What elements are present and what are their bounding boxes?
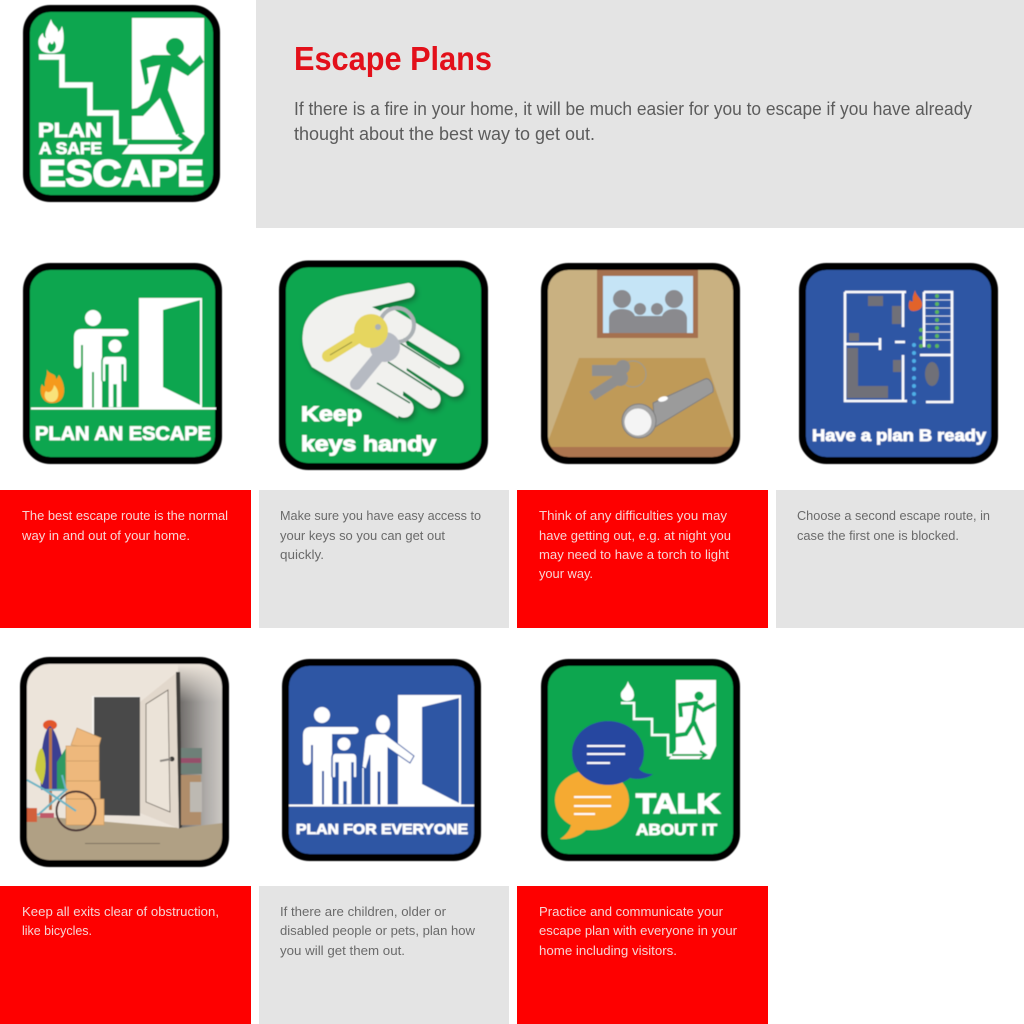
text card: clear exits: [0, 886, 251, 1024]
text card: practice: Practice and communicate your: [539, 904, 724, 919]
text card: practice: home including visitors.: [539, 943, 677, 958]
text card: everyone: you will get them out.: [280, 943, 405, 958]
icon: torch and keys scene: [540, 266, 740, 462]
text card: clear exits: like bicycles.: [22, 923, 92, 938]
sign text: PLAN FOR EVERYONE: [296, 822, 468, 838]
blue speech bubble: [572, 721, 653, 785]
text card: difficulties: Think of any difficulties you may: [539, 508, 728, 523]
text card: clear exits: Keep all exits clear of obstruction,: [22, 904, 219, 919]
flame: [41, 367, 64, 403]
bicycle: [27, 775, 96, 830]
exit door: [122, 18, 204, 154]
icon: stairs: [39, 57, 130, 142]
text card: normal route: way in and out of your home.: [21, 528, 190, 543]
table: [546, 358, 735, 447]
open door: [140, 672, 182, 829]
keys: [328, 308, 414, 384]
text card: keys: Make sure you have easy access to: [280, 508, 481, 523]
text card: practice: escape plan with everyone in your: [539, 923, 738, 938]
sign text: [301, 403, 436, 456]
coat stand: [35, 720, 66, 810]
escape route dots: [912, 343, 916, 404]
text card: difficulties: [517, 490, 768, 628]
sign text: keys handy: [301, 433, 436, 456]
icon: have a plan B ready sign: [802, 266, 994, 460]
sign text: ESCAPE: [39, 153, 204, 194]
floor: [27, 815, 223, 860]
text card: difficulties: may need to have a torch to light: [539, 547, 729, 562]
cardboard boxes: [66, 728, 104, 825]
title: Escape Plans: [294, 40, 492, 77]
three figures: [303, 707, 414, 805]
running figure: [125, 38, 204, 150]
text card: practice: [517, 886, 768, 1024]
stacked clothes: [181, 748, 202, 825]
sign text: [636, 788, 720, 839]
text card: second route: Choose a second escape route, in: [797, 508, 990, 523]
door: [398, 695, 461, 805]
intro text: thought about the best way to get out.: [294, 124, 595, 144]
text card: everyone: [259, 886, 509, 1024]
intro text: If there is a fire in your home, it will be much easier for you to escape if you have already: [294, 99, 972, 119]
hand: [302, 283, 454, 418]
sign text: Have a plan B ready: [812, 426, 987, 445]
sign text: PLAN: [38, 120, 102, 142]
wall shadow: [178, 664, 224, 829]
keys on table: [592, 360, 646, 396]
text card: difficulties: your way.: [539, 566, 593, 581]
small flame: [621, 681, 634, 701]
icon: plan an escape sign: [26, 266, 218, 460]
door opening: [92, 696, 140, 734]
sign text: [38, 120, 204, 194]
sign text: A SAFE: [39, 139, 102, 158]
torch: [622, 379, 713, 438]
sign text: Keep: [301, 403, 362, 426]
icon: plan a safe escape sign: [26, 8, 216, 198]
text card: second route: [776, 490, 1024, 628]
text card: keys: [259, 490, 509, 628]
text card: second route: case the first one is blocked.: [797, 528, 959, 543]
text card: everyone: disabled people or pets, plan how: [280, 923, 476, 938]
text card: everyone: If there are children, older or: [280, 904, 447, 919]
floor plan: [845, 290, 952, 404]
flame: [909, 290, 922, 311]
intro text: [294, 99, 972, 144]
icon: flame: [38, 19, 64, 53]
icon: cluttered doorway scene: [24, 660, 226, 864]
icon: plan for everyone sign: [286, 662, 478, 858]
small stairs: [621, 703, 675, 755]
text card: difficulties: have getting out, e.g. at night you: [539, 528, 731, 543]
orange speech bubble: [555, 770, 629, 839]
text card: keys: quickly.: [280, 547, 324, 562]
sign text: ABOUT IT: [636, 822, 717, 839]
icon: talk about it sign: [544, 662, 736, 858]
icon: keep keys handy sign: [282, 264, 484, 466]
sign text: PLAN AN ESCAPE: [35, 424, 211, 445]
text card: normal route: [0, 490, 251, 628]
text card: keys: your keys so you can get out: [280, 528, 445, 543]
small exit door with runner: [669, 680, 716, 759]
text card: normal route: The best escape route is the normal: [22, 508, 228, 523]
sign text: TALK: [636, 788, 720, 819]
door: [139, 298, 202, 408]
adult and child figures: [74, 310, 128, 408]
header panel: [256, 0, 1024, 228]
family picture: [597, 270, 698, 338]
